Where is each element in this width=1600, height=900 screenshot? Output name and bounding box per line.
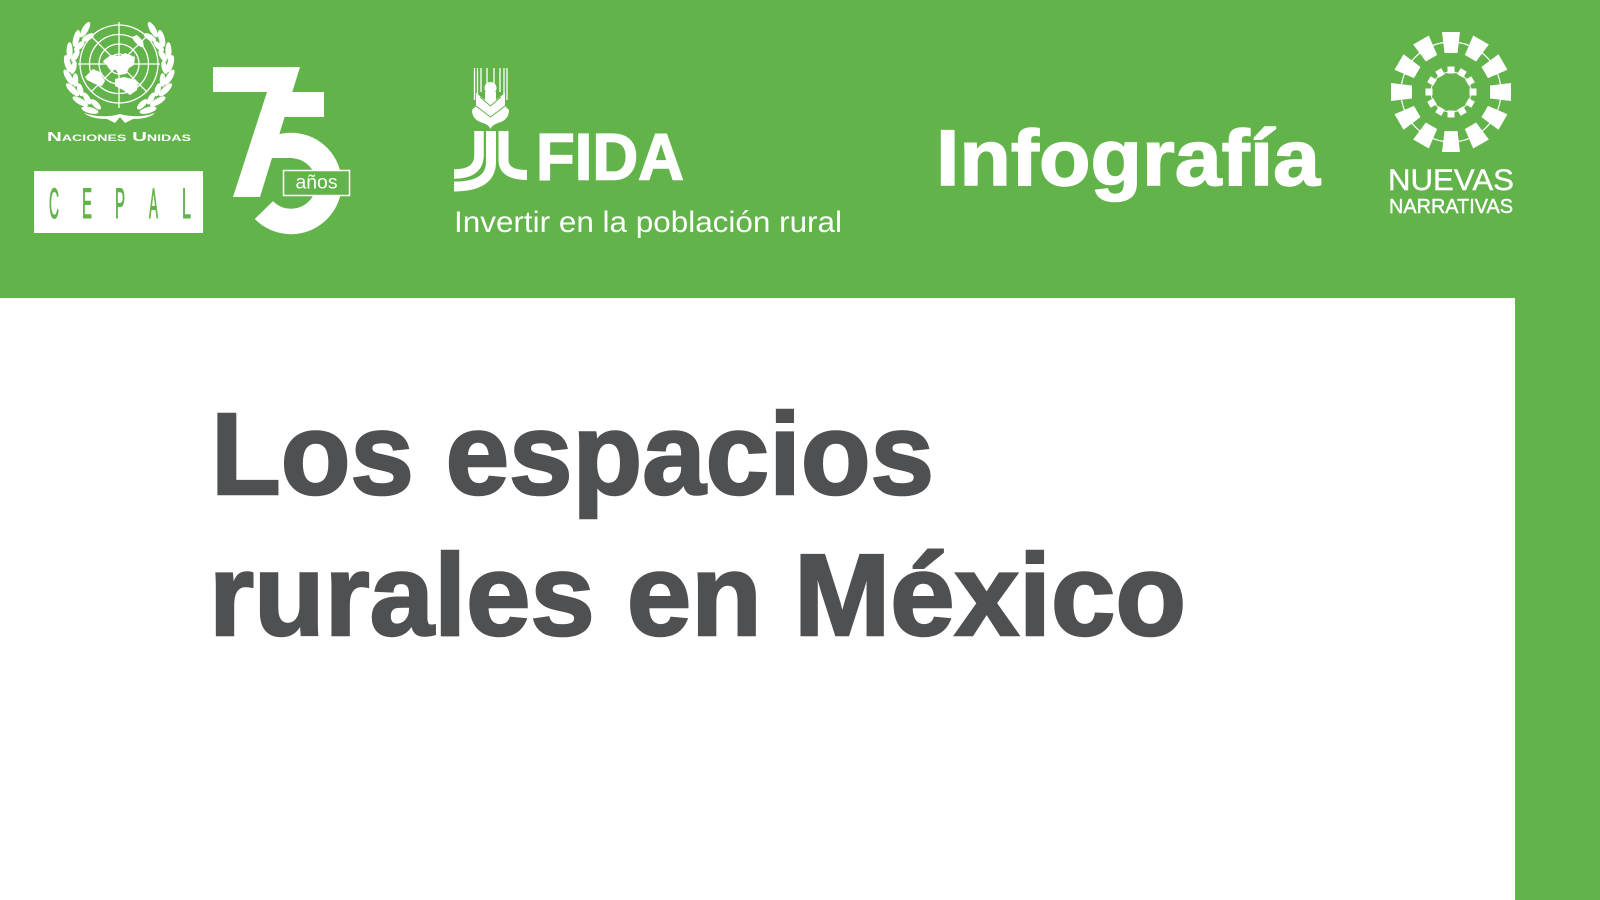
ribbon (84, 113, 155, 123)
label: NUEVAS: NUEVAS (1388, 164, 1514, 197)
CEPAL letters (49, 180, 191, 228)
title line 1: Los espacios (211, 389, 934, 519)
CEPAL white box (34, 171, 203, 233)
numeral 7 (213, 67, 300, 197)
CEPAL letters: E (82, 180, 92, 228)
FIDA wordmark: FIDA (536, 120, 684, 194)
años tag (284, 170, 350, 196)
label: NARRATIVAS: NARRATIVAS (1389, 196, 1513, 218)
logo: CEPAL: L (182, 180, 191, 228)
title line 2: rurales en México (209, 530, 1186, 660)
CEPAL letters: A (149, 180, 158, 228)
logo: Nuevas Narrativas (1388, 32, 1514, 218)
icon: inner gear ring (1426, 66, 1476, 118)
icon: laurel wreath (62, 21, 176, 123)
años text: años (296, 172, 338, 194)
icon: outer gear ring (1391, 32, 1511, 152)
logo: FIDA (454, 68, 842, 239)
CEPAL letters: P (115, 180, 125, 228)
numeral 5 (262, 92, 329, 221)
label: Naciones Unidas: Naciones Unidas (47, 129, 191, 144)
logo: CEPAL (34, 171, 203, 233)
title (209, 389, 1186, 660)
header band (0, 0, 1600, 298)
logo: Naciones Unidas emblem (47, 21, 191, 144)
FIDA tagline: Invertir en la población rural (454, 206, 842, 239)
icon: wheat ear (472, 68, 509, 129)
icon: UN globe (78, 22, 160, 108)
icon: JJL stems (454, 131, 527, 186)
logo: 75 años (213, 67, 350, 221)
right green strip (1515, 0, 1600, 900)
label: Infografía: Infografía (936, 113, 1321, 202)
left branch (62, 21, 103, 115)
right branch (135, 21, 176, 115)
CEPAL letters: C (49, 180, 59, 228)
